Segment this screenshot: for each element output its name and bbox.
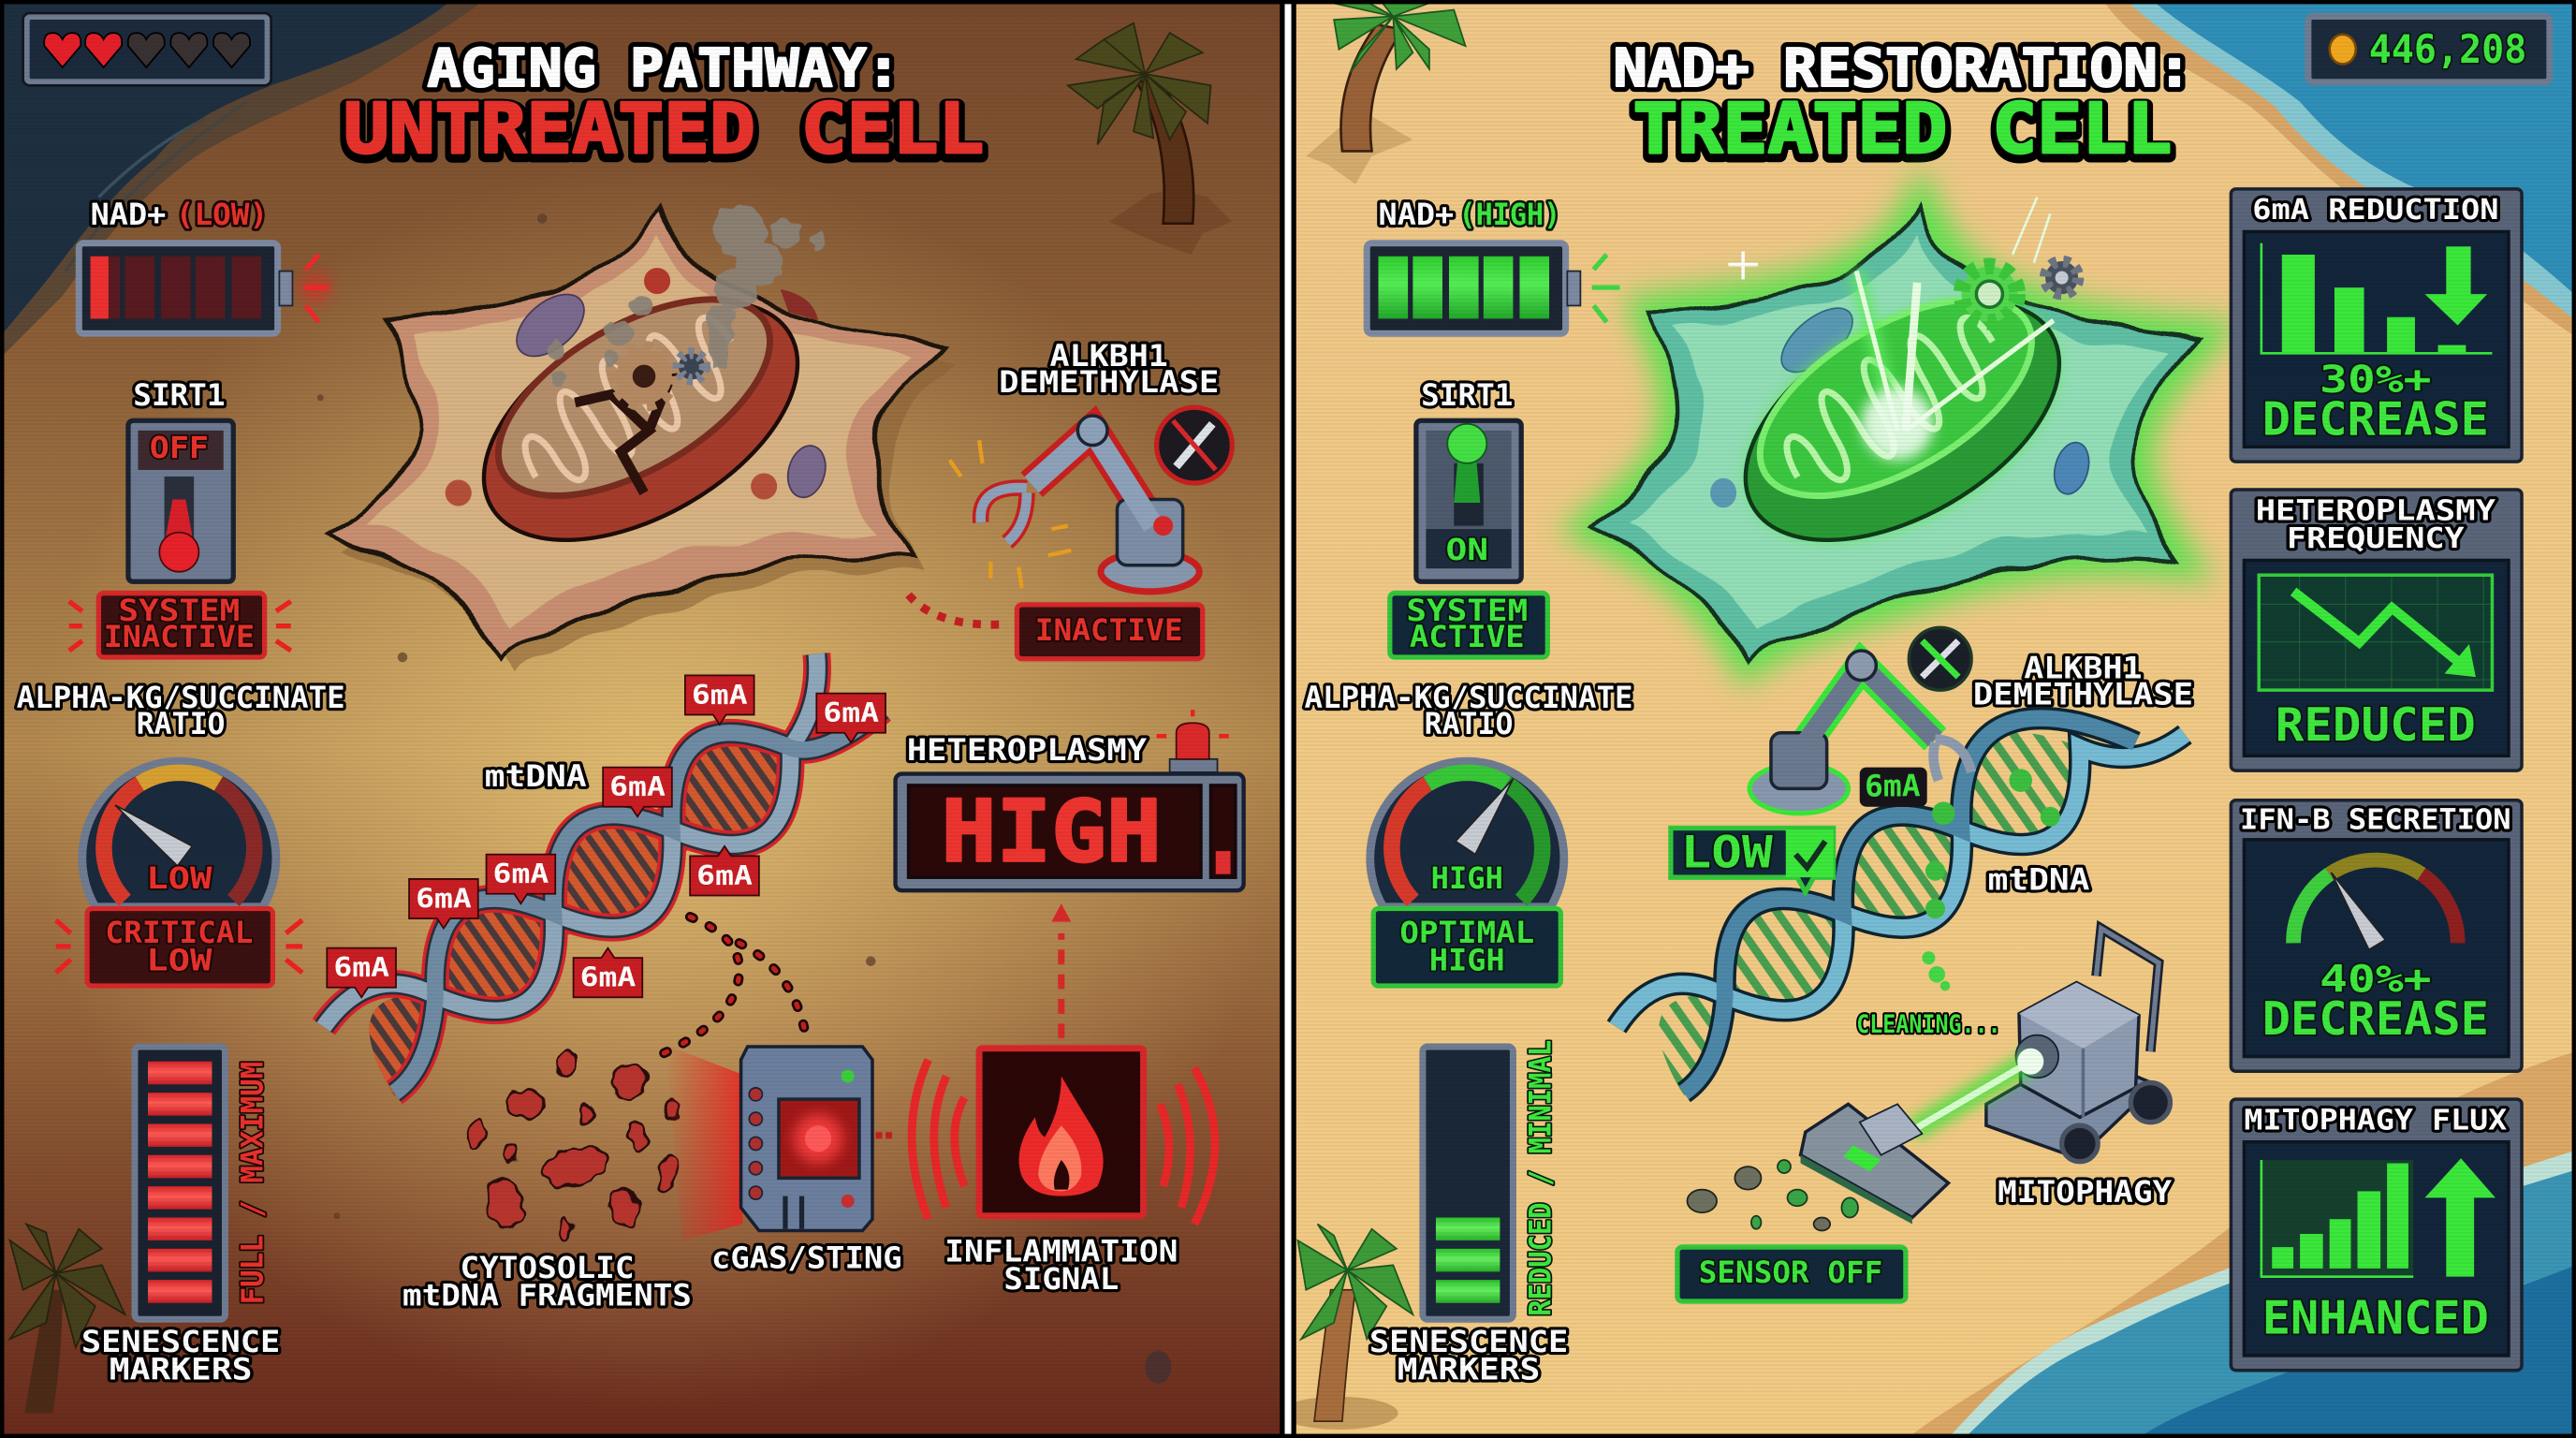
label: alkbh1 right bbox=[1973, 652, 2193, 712]
label: sirt1 right: SIRT1 bbox=[1421, 379, 1513, 413]
gear: grey bbox=[2045, 261, 2078, 294]
cleaner head bbox=[1801, 1104, 1949, 1217]
switch: off: OFF bbox=[150, 432, 209, 465]
status: critical low bbox=[56, 909, 302, 986]
tag: 6mA markers: 6mA bbox=[493, 858, 549, 889]
arrow: inflammation to heteroplasmy bbox=[1051, 903, 1071, 1038]
title: nad restoration: NAD+ RESTORATION: bbox=[1613, 38, 2191, 99]
link: sting to inflammation bbox=[875, 1134, 892, 1137]
icon: vacuum machine mitophagy bbox=[1687, 929, 2170, 1231]
panel: heteroplasmy frequency bbox=[2231, 490, 2522, 770]
display: high bbox=[896, 774, 1244, 890]
panel: ifn-b secretion: DECREASE bbox=[2262, 991, 2489, 1046]
mitochondrion healthy bbox=[1704, 249, 2101, 593]
status: system inactive: SYSTEM bbox=[118, 594, 240, 628]
smoke bbox=[546, 204, 827, 386]
gauge: low: LOW bbox=[146, 862, 213, 896]
label: mtdna right: mtDNA bbox=[1988, 864, 2089, 898]
label: senescence markers left: MARKERS bbox=[110, 1354, 252, 1387]
laser bbox=[1912, 1062, 2030, 1130]
switch: off bbox=[128, 420, 233, 581]
tag: low check: LOW bbox=[1680, 827, 1773, 878]
tag: 6mA markers: 6mA bbox=[609, 771, 666, 802]
hud: coin score: 446,208 bbox=[2369, 26, 2526, 72]
panel: heteroplasmy frequency: HETEROPLASMY bbox=[2256, 494, 2496, 527]
panel: 6mA reduction bbox=[2231, 189, 2522, 462]
label: inflammation signal bbox=[944, 1235, 1178, 1297]
status: critical low: LOW bbox=[146, 945, 213, 978]
panel: 6mA reduction: DECREASE bbox=[2262, 392, 2489, 447]
dotted link to inactive bbox=[909, 594, 1005, 624]
label: ratio right: ALPHA-KG/SUCCINATE bbox=[1305, 682, 1633, 715]
bar chart decrease bbox=[2261, 243, 2492, 353]
label: senescence markers right bbox=[1369, 1326, 1568, 1387]
gear: tan broken bbox=[616, 348, 672, 404]
nad low label: NAD+ bbox=[91, 198, 166, 232]
title: nad restoration: TREATED CELL bbox=[1633, 90, 2172, 169]
switch: on: ON bbox=[1445, 534, 1488, 567]
tag: 6mA markers: 6mA bbox=[333, 952, 389, 983]
label: cleaning: CLEANING... bbox=[1856, 1011, 2001, 1039]
gear: green bbox=[1962, 266, 2017, 322]
dotted paths from dna bbox=[661, 917, 805, 1055]
panel: treated cell background bbox=[1280, 0, 2576, 1438]
label: heteroplasmy: HETEROPLASMY bbox=[907, 734, 1147, 768]
illustration: healthy cell bbox=[1592, 198, 2203, 661]
panel: 6mA reduction: 30%+ bbox=[2320, 358, 2431, 402]
tag: 6mA removed: 6mA bbox=[1865, 770, 1921, 804]
hud: lives hearts bbox=[23, 13, 271, 85]
battery low bbox=[79, 243, 332, 333]
icon: wrench disabled bbox=[1157, 407, 1232, 483]
gauge decrease bbox=[2293, 860, 2458, 949]
title: nad restoration bbox=[1613, 38, 2191, 173]
dotted green particles bbox=[1922, 951, 1950, 990]
title: aging pathway bbox=[344, 38, 984, 173]
line chart falling bbox=[2259, 575, 2492, 690]
bar: senescence full bbox=[135, 1047, 225, 1319]
label: inflammation signal: SIGNAL bbox=[1003, 1263, 1119, 1297]
panel: heteroplasmy frequency: REDUCED bbox=[2276, 697, 2476, 752]
icon: wrench active bbox=[1909, 627, 1971, 690]
title: nad restoration: TREATED CELL bbox=[1633, 94, 2172, 173]
vertical label: reduced minimal: REDUCED / MINIMAL bbox=[1524, 1040, 1558, 1316]
title: aging pathway: AGING PATHWAY: bbox=[427, 38, 900, 99]
label: alkbh1 right: ALKBH1 bbox=[2024, 652, 2143, 685]
speckles bbox=[317, 213, 1171, 1384]
label: ratio left: ALPHA-KG/SUCCINATE bbox=[17, 682, 345, 715]
tag: 6mA markers: 6mA bbox=[696, 860, 753, 891]
title: nad restoration: NAD+ RESTORATION: bbox=[1613, 38, 2191, 99]
label: cytosolic mtdna fragments: mtDNA FRAGMENTS bbox=[402, 1280, 692, 1313]
tag: 6mA markers bbox=[327, 675, 886, 997]
illustration: damaged cell bbox=[329, 204, 953, 675]
status: inactive: INACTIVE bbox=[1035, 614, 1183, 648]
label: senescence markers left bbox=[81, 1326, 280, 1387]
bar chart rising bbox=[2261, 1158, 2496, 1277]
status: system active: ACTIVE bbox=[1410, 621, 1525, 654]
label: inflammation signal: INFLAMMATION bbox=[944, 1235, 1178, 1269]
display: high: HIGH bbox=[942, 782, 1162, 882]
label: alkbh1 left: DEMETHYLASE bbox=[999, 366, 1219, 400]
status: sensor off bbox=[1677, 1247, 1906, 1301]
tag: 6mA markers: 6mA bbox=[692, 680, 748, 711]
panel: mitophagy flux: ENHANCED bbox=[2262, 1291, 2489, 1345]
tag: 6mA markers: 6mA bbox=[823, 697, 879, 728]
label: alkbh1 left: ALKBH1 bbox=[1050, 340, 1168, 374]
sparks bbox=[949, 440, 1071, 588]
panel: ifn-b secretion: IFN-B SECRETION bbox=[2240, 803, 2511, 836]
status: system active: SYSTEM bbox=[1406, 594, 1528, 628]
label: ratio left: RATIO bbox=[137, 708, 225, 741]
nad low label bbox=[91, 198, 268, 232]
label: sirt1 left: SIRT1 bbox=[133, 379, 225, 413]
tag: 6mA markers: 6mA bbox=[580, 962, 636, 993]
label: alkbh1 left bbox=[999, 340, 1219, 400]
cytosolic fragments bbox=[464, 1049, 681, 1240]
status: sensor off: SENSOR OFF bbox=[1699, 1256, 1882, 1290]
panel: heteroplasmy frequency: FREQUENCY bbox=[2287, 522, 2465, 555]
ocean top-right bbox=[2102, 0, 2576, 337]
label: mitophagy: MITOPHAGY bbox=[1998, 1176, 2172, 1210]
label: cytosolic mtdna fragments bbox=[402, 1252, 692, 1313]
status: inactive bbox=[1017, 605, 1203, 659]
palm tree top-right panel bbox=[1306, 0, 1466, 184]
battery high bbox=[1367, 243, 1620, 333]
icon: inflammation signal bbox=[912, 1049, 1215, 1224]
label: mtdna left: mtDNA bbox=[485, 760, 587, 794]
hud: coin score bbox=[2308, 17, 2550, 82]
tag: low check bbox=[1671, 827, 1834, 892]
panel: mitophagy flux bbox=[2231, 1099, 2522, 1371]
dna: damaged helix bbox=[324, 654, 886, 1117]
label: ratio left bbox=[17, 682, 345, 741]
status: system inactive: INACTIVE bbox=[104, 621, 255, 654]
label: alkbh1 right: DEMETHYLASE bbox=[1973, 678, 2193, 712]
tag: 6mA removed bbox=[1860, 768, 1927, 807]
nad high label: (HIGH) bbox=[1459, 198, 1560, 232]
status: system active bbox=[1390, 594, 1547, 657]
gauge: high bbox=[1370, 761, 1564, 907]
ocean bottom-right bbox=[1906, 1051, 2576, 1438]
status: optimal high: HIGH bbox=[1429, 945, 1505, 978]
switch: on bbox=[1416, 420, 1521, 581]
title: aging pathway: AGING PATHWAY: bbox=[427, 38, 900, 99]
gear: grey bbox=[679, 353, 705, 379]
tag: 6mA markers: 6mA bbox=[416, 884, 472, 915]
panel: mitophagy flux: MITOPHAGY FLUX bbox=[2244, 1104, 2507, 1137]
mitochondrion damaged bbox=[444, 252, 838, 590]
status: optimal high bbox=[1373, 909, 1560, 986]
palm tree bottom-right panel bbox=[1280, 1224, 1412, 1430]
label: cytosolic mtdna fragments: CYTOSOLIC bbox=[460, 1252, 634, 1285]
gauge: high: HIGH bbox=[1431, 862, 1503, 896]
panel: untreated cell background bbox=[0, 0, 1284, 1438]
status: optimal high: OPTIMAL bbox=[1399, 917, 1534, 950]
organelles bbox=[505, 283, 595, 368]
panel: 6mA reduction: 6mA REDUCTION bbox=[2252, 194, 2498, 227]
red cone bbox=[666, 1045, 742, 1240]
nad high label: NAD+ bbox=[1379, 198, 1454, 232]
bar: senescence reduced bbox=[1423, 1047, 1513, 1319]
debris bbox=[1687, 1167, 1830, 1231]
organelles bbox=[1770, 296, 1864, 384]
label: ratio right bbox=[1305, 682, 1633, 741]
status: system inactive bbox=[69, 594, 291, 657]
vertical label: full maximum: FULL / MAXIMUM bbox=[236, 1062, 270, 1304]
title: aging pathway: UNTREATED CELL bbox=[344, 90, 984, 169]
label: cgas sting: cGAS/STING bbox=[711, 1241, 902, 1275]
icon: robot arm active bbox=[1749, 627, 1971, 814]
nad high label bbox=[1379, 198, 1560, 232]
label: ratio right: RATIO bbox=[1425, 708, 1513, 741]
panel: ifn-b secretion bbox=[2231, 800, 2522, 1071]
label: senescence markers right: MARKERS bbox=[1398, 1354, 1540, 1387]
nad low label: (LOW) bbox=[176, 198, 268, 232]
flame bbox=[1019, 1077, 1104, 1196]
status: critical low: CRITICAL bbox=[105, 917, 253, 950]
icon: cgas sting machine bbox=[741, 1047, 872, 1231]
palm tree bottom-left panel bbox=[10, 1224, 124, 1413]
signal arcs bbox=[912, 1060, 1215, 1224]
dna: healthy helix bbox=[1617, 718, 2185, 1093]
energy beams bbox=[1856, 198, 2054, 431]
title: aging pathway: UNTREATED CELL bbox=[344, 94, 984, 173]
icon: robot arm inactive bbox=[949, 407, 1232, 592]
label: senescence markers right: SENESCENCE bbox=[1369, 1326, 1568, 1359]
icon: alarm beacon bbox=[1157, 710, 1229, 772]
label: senescence markers left: SENESCENCE bbox=[81, 1326, 280, 1359]
dark ocean top-left bbox=[0, 0, 452, 337]
panel: ifn-b secretion: 40%+ bbox=[2320, 957, 2431, 1001]
gauge: low bbox=[82, 761, 276, 907]
palm tree top-left panel bbox=[1068, 23, 1232, 255]
